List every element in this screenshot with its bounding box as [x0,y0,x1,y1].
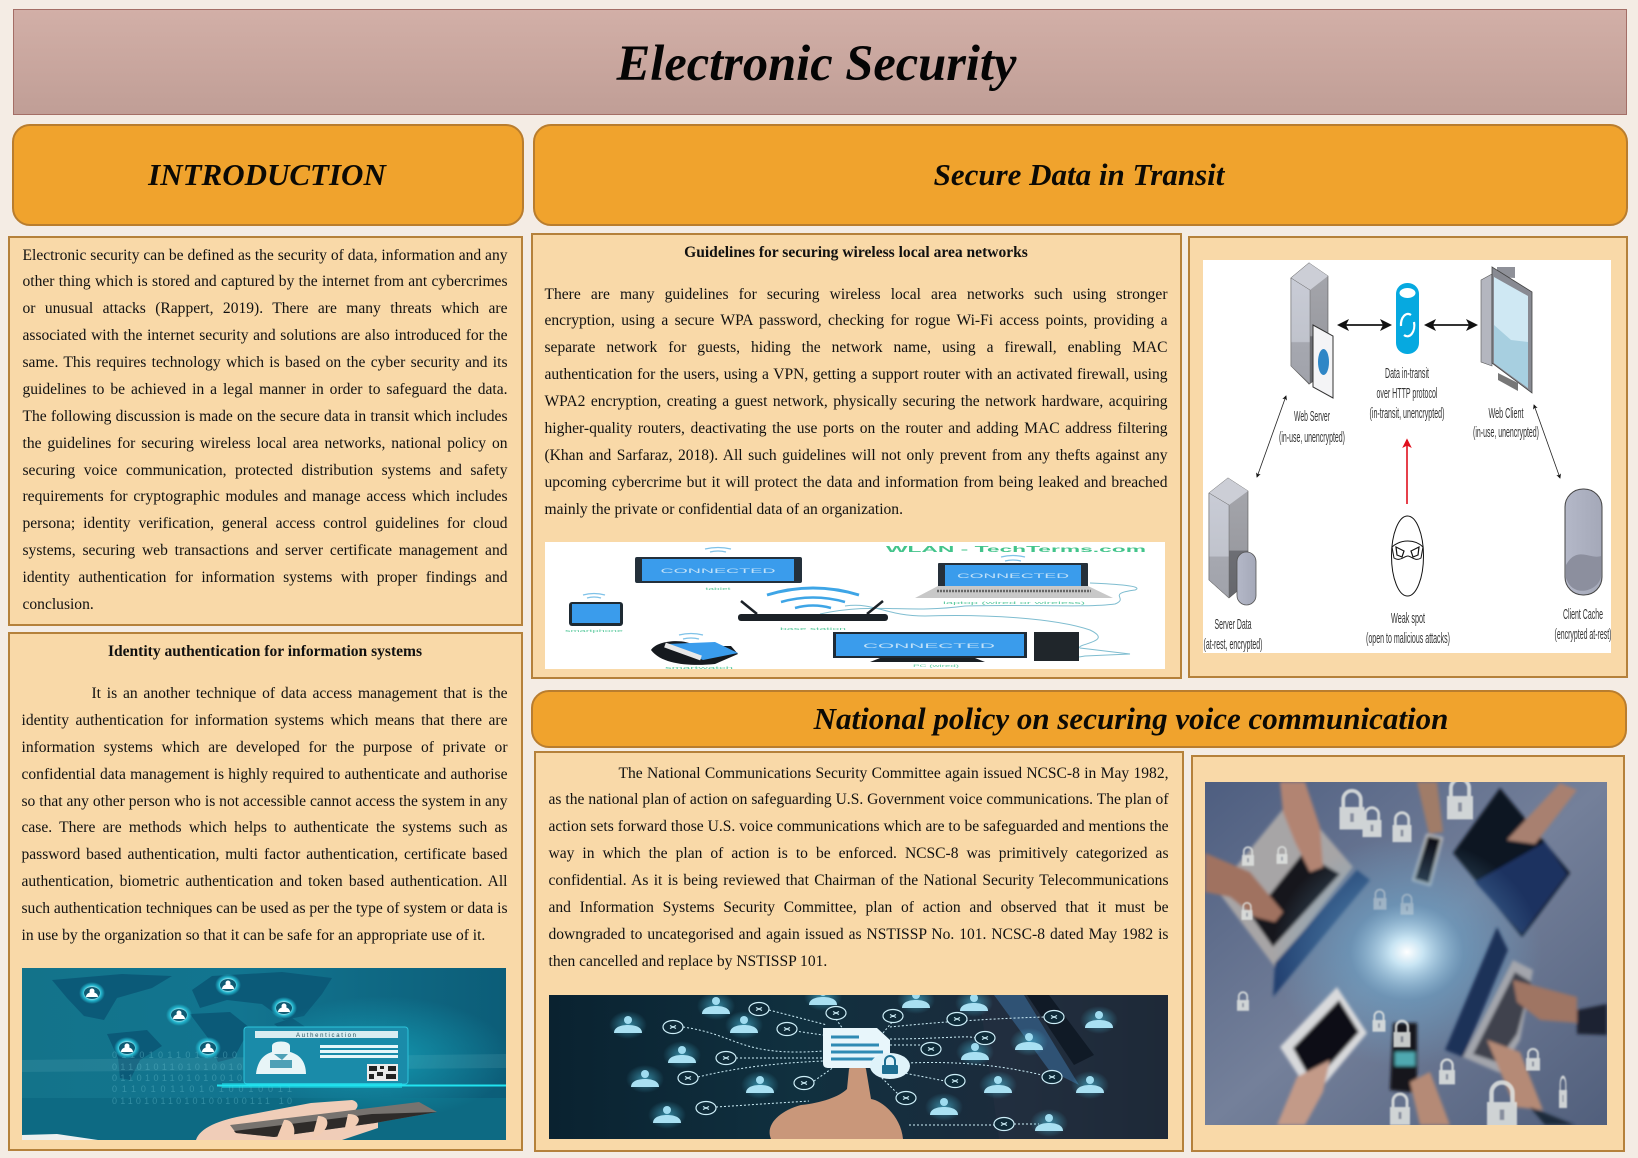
client cache cylinder [1565,489,1602,595]
smartphone [565,594,625,633]
image: authentication on phone [22,968,506,1140]
heading: national policy [531,690,1627,748]
introduction paragraph: other thing which is stored and captured by the internet from ant cybercrimes [22,273,508,290]
image: data network with finger touch [549,995,1168,1139]
diagram labels: over HTTP protocol [1376,385,1438,402]
title banner: Electronic Security [617,35,1016,91]
network user icons [609,983,1118,1137]
router [738,588,888,631]
top-right tablet [1453,783,1577,937]
binary digits: 01101011010100100111 10 [112,1096,292,1106]
introduction paragraph: or unusual attacks (Rappert, 2019). There are many threats which are [22,300,508,317]
web client monitor [1481,267,1532,393]
weak spot masked head [1392,516,1424,596]
bottom-right laptop [1445,927,1607,1125]
guidelines paragraph: encryption, using a secure WPA password, checking for rogue Wi-Fi access points, providing a [544,312,1168,329]
introduction paragraph: persona; identity verification, general access control guidelines for cloud [22,515,508,532]
introduction paragraph: requirements for cryptographic modules and manage access which includes [22,488,508,505]
national policy paragraph: as the national plan of action on safeguarding U.S. Government voice communications. The plan of [548,791,1168,808]
heading: secure data in transit: Secure Data in Transit [934,157,1224,192]
introduction paragraph: conclusion. [22,596,94,613]
diagram labels: Web Client [1488,405,1524,422]
desktop PC: CONNECTED [863,643,996,650]
panel: guidelines for WLAN [531,233,1182,679]
introduction paragraph: identity authentication for information systems with proper findings and [22,569,508,586]
binary digits: 0110101101010010 [112,1073,242,1083]
data in-transit cylinder [1396,283,1419,354]
introduction paragraph: the guidelines for securing wireless local area networks, national policy on [22,435,508,452]
desktop PC [833,632,1079,668]
web server icon [1291,263,1333,398]
introduction paragraph: associated with the internet security and solutions are also introduced for the [22,327,508,344]
national policy paragraph: and Information Systems Security Committee, plan of action and observed that it must be [548,899,1168,916]
identity authentication paragraph: password based authentication, multi factor authentication, certificate based [22,846,508,863]
document and lock icon [823,1028,910,1079]
hand pointing [770,1064,903,1139]
introduction paragraph [22,246,508,613]
introduction paragraph: same. This requires technology which is based on the cyber security and its [22,354,508,371]
network dotted links [683,1010,1044,1125]
heading: secure data in transit [533,124,1628,226]
identity authentication paragraph: so that any other person who is not accessible cannot access the system in any [22,792,508,810]
guidelines paragraph: (Khan and Sarfaraz, 2018). All such guidelines will not only prevent from any thefts against any [544,447,1168,464]
national policy paragraph: way in which the plan of action is to be enforced. NCSC-8 was primitively categorized as [548,845,1168,862]
introduction paragraph: Electronic security can be defined as the security of data, information and any [22,246,508,264]
panel: identity authentication [8,632,523,1151]
world map [52,972,332,1080]
diagram labels: Web Server [1294,408,1330,425]
identity authentication paragraph: authentication, biometric authentication and token based authentication. All [22,873,508,890]
hand holding phone [22,1100,437,1140]
guidelines paragraph: upcoming cybercrime but it will protect the data and information from being leaked and breached [544,474,1168,491]
heading: introduction: INTRODUCTION [148,157,386,192]
guidelines paragraph: higher-quality routers, deactivating the use ports on the router and adding MAC address filtering [544,420,1168,437]
binary digits [112,1050,292,1106]
identity authentication paragraph: identity authentication for information systems which means that there are [22,712,508,729]
top phone and hand [1413,782,1443,885]
identity authentication paragraph: It is an another technique of data access management that is the [92,685,508,702]
national policy paragraph: The National Communications Security Committee again issued NCSC-8 in May 1982, [618,764,1168,782]
central glow [1272,837,1542,1067]
diagram labels: Data in-transit [1385,365,1429,382]
image: people with devices and padlocks [1205,782,1607,1125]
authentication card: Authentication [296,1033,356,1039]
panel: data in transit diagram [1188,236,1628,678]
panel: cyber security photo frame [1191,755,1625,1152]
heading: introduction [12,124,524,226]
guidelines paragraph: WPA2 encryption, creating a guest network, physically securing the network hardware, acquiring [544,393,1168,410]
diagram: data in transit [1203,260,1611,653]
introduction paragraph: guidelines to be achieved in a legal manner in order to safeguard the data. [22,381,508,398]
national policy paragraph: downgraded to uncategorised and again issued as NSTISSP No. 101. NCSC-8 dated May 1982 is [548,926,1168,943]
identity authentication paragraph [22,685,508,944]
diagram labels [1204,365,1612,653]
tablet: tablet [706,586,733,591]
bottom-left tablet [1277,987,1367,1125]
identity authentication paragraph: case. There are methods which helps to authenticate the systems such as [22,819,508,836]
padlock icons [1237,779,1567,1129]
identity authentication paragraph: information systems which are developed for the purpose of private or [22,739,508,756]
diagonal arrows [1257,396,1560,478]
identity authentication paragraph: such authentication techniques can be used as per the type of system or data is [22,900,508,917]
laptop: laptop (wired or wireless) [943,600,1087,605]
guidelines heading: Guidelines for securing wireless local area networks [684,244,1028,260]
national policy paragraph: confidential. As it is being reviewed that Chairman of the National Security Telecommunications [548,872,1168,889]
national policy paragraph [548,764,1169,970]
identity authentication heading: Identity authentication for information systems [108,642,422,660]
WLAN title: WLAN - TechTerms.com [886,544,1147,554]
identity authentication paragraph: confidential data management is highly required to authenticate and authorise [22,766,508,783]
router: base station [780,626,846,631]
binary digits: 01101011010100 [112,1050,237,1060]
diagram labels: Weak spot [1391,610,1425,627]
panel: national policy text [534,751,1184,1152]
guidelines paragraph: authentication for the users, using a VPN, getting a support router with an activated firewall, using [544,366,1168,383]
smartphone: smartphone [565,628,625,633]
smartwatch [651,634,738,670]
map markers [79,974,297,1059]
authentication card [244,1027,408,1084]
panel: introduction text [8,236,523,626]
top-left laptop [1205,782,1370,997]
binary digits: 0110101101010010 [112,1062,242,1072]
tablet: CONNECTED [660,569,777,575]
red attack arrow [1406,440,1408,504]
heading: national policy: National policy on securing voice communication [814,701,1448,736]
server data icon [1209,478,1256,605]
diagram labels: (in-use, unencrypted) [1473,424,1539,441]
introduction paragraph: securing voice communication, protected distribution systems and safety [22,462,508,478]
guidelines paragraph [544,286,1168,518]
transit arrows [1339,324,1476,326]
tablet [635,548,802,591]
guidelines paragraph: mainly the private or confidential data of an organization. [544,500,903,518]
network key nodes [663,1002,1064,1130]
diagram labels: (at-rest, encrypted) [1204,636,1262,653]
national policy paragraph: then cancelled and replace by NSTISSP 101. [548,953,827,970]
diagram labels: (open to malicious attacks) [1366,630,1450,647]
suit and tie [979,995,1168,1139]
introduction paragraph: The following discussion is made on the secure data in transit which includes [22,408,508,425]
guidelines paragraph: separate network for guests, hiding the network name, using a firewall, enabling MAC [544,339,1168,356]
diagram labels: (in-use, unencrypted) [1279,429,1345,446]
diagram labels: (in-transit, unencrypted) [1370,405,1444,422]
identity authentication paragraph: in use by the organization so that it can be safe for an appropriate use of it. [22,927,485,944]
title banner [13,9,1627,115]
national policy paragraph: action sets forward those U.S. voice communications which are to be safeguarded and mentions the [548,818,1168,835]
introduction paragraph: systems, securing web transactions and server certificate management and [22,542,508,559]
binary digits: 0110101101010010011 [112,1084,292,1094]
laptop [915,556,1113,605]
guidelines paragraph: There are many guidelines for securing wireless local area networks such using stronger [544,286,1168,302]
cables [820,583,1137,657]
bottom phone and hand [1390,1023,1450,1125]
image: WLAN network [545,542,1165,669]
diagram labels: Server Data [1214,616,1252,633]
desktop PC: PC (wired) [913,663,961,668]
laptop: CONNECTED [957,574,1071,580]
